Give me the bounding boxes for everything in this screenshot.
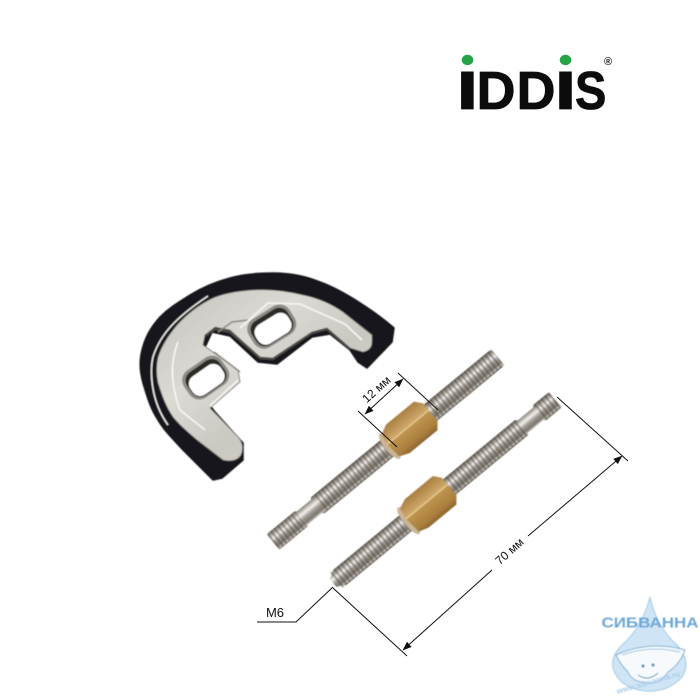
- threaded stud with brass nut: front: [321, 385, 567, 597]
- threaded stud with brass nut: back: [261, 343, 509, 556]
- logo wordmark: D: [476, 61, 516, 121]
- arrow to upper end: [528, 456, 622, 536]
- silver plate: [156, 290, 372, 461]
- brass nut: [393, 472, 461, 538]
- black rubber gasket: [140, 273, 394, 480]
- arrow to lower end: [403, 570, 492, 650]
- logo wordmark: [456, 61, 606, 121]
- tub face: [641, 663, 655, 668]
- bathtub: [616, 646, 685, 683]
- plate rim highlight: [152, 296, 208, 425]
- logo registered mark: ®: [604, 56, 612, 68]
- extension lines: [358, 373, 438, 447]
- logo wordmark: S: [575, 61, 606, 121]
- dimension: 12 mm: [358, 373, 438, 447]
- plate hole right: [243, 300, 301, 353]
- logo wordmark: I: [554, 61, 576, 121]
- watermark: Sibvanna: [602, 597, 699, 696]
- leader line: [257, 587, 333, 622]
- extension lines: [333, 397, 628, 656]
- logo wordmark: D: [516, 61, 556, 121]
- url: www.sibvanna.ru: [615, 669, 681, 696]
- stud threads: [329, 392, 562, 589]
- logo: IDDIS: [456, 55, 612, 121]
- dimension: 70 mm: [333, 397, 628, 656]
- brass nut: [374, 398, 442, 463]
- label: 12 мм: [359, 373, 393, 406]
- stud body: [327, 392, 562, 591]
- mounting plate: [140, 273, 394, 480]
- logo dots: [462, 55, 571, 65]
- callout: M6: [257, 587, 333, 622]
- name: СИБВАННА: [602, 616, 699, 632]
- plate bevel shading: [205, 329, 350, 359]
- stud threads: [266, 349, 505, 550]
- arrow: [365, 379, 403, 414]
- water drop: [613, 597, 686, 691]
- stud body: [266, 349, 505, 550]
- logo wordmark: I: [456, 61, 478, 121]
- label: 70 мм: [492, 535, 526, 568]
- plate hole left: [177, 351, 234, 404]
- label: M6: [266, 605, 284, 620]
